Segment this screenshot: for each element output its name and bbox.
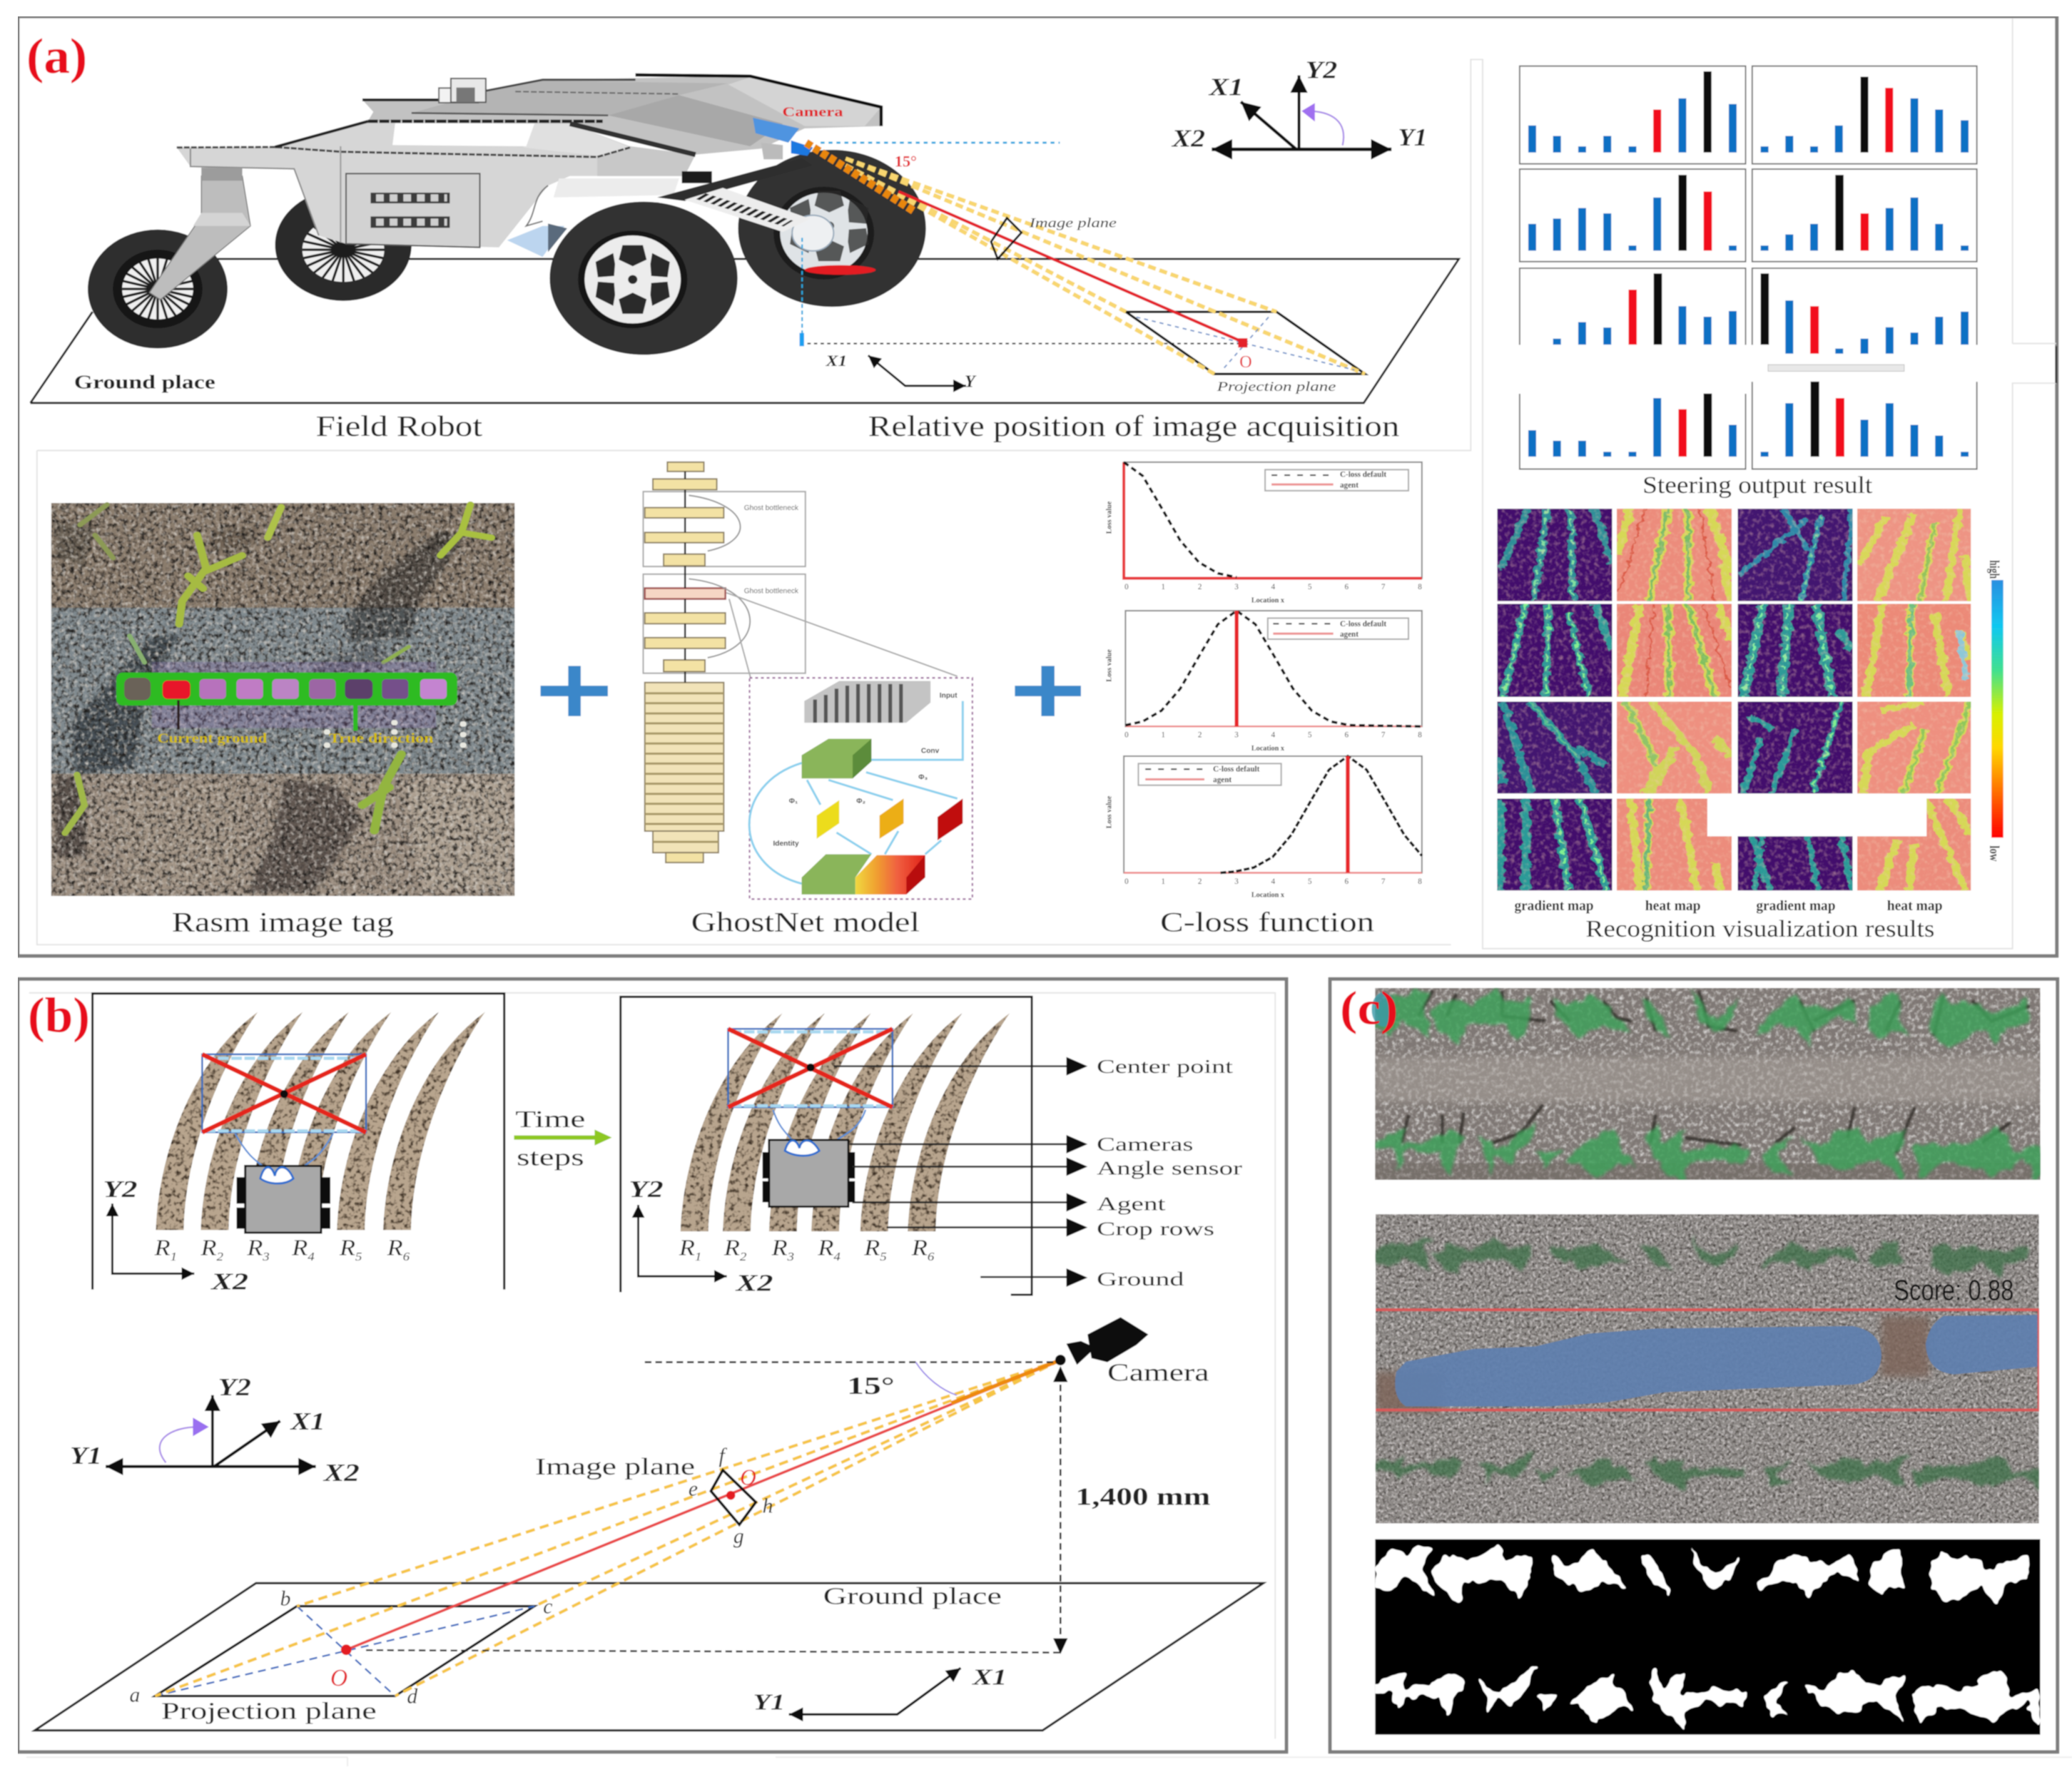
- far front wheel: [738, 150, 926, 307]
- field photo: original: [1375, 985, 2041, 1186]
- connecting arrows: [684, 472, 686, 683]
- C-loss chart text: C-loss default: [1340, 471, 1386, 479]
- optical axis: [346, 1360, 1060, 1650]
- gradient tile r3c3: [1737, 701, 1854, 795]
- time steps arrow: [514, 1106, 611, 1171]
- ground coordinate axes: Y: [965, 373, 977, 392]
- C-loss chart text: [1106, 471, 1422, 900]
- plus sign left: [540, 666, 608, 716]
- light blue rear shroud: [507, 223, 567, 257]
- row labels: 4: [308, 1250, 315, 1263]
- coordinate axes top right: Y2: [1306, 56, 1337, 83]
- gradient tile r2c1: [1497, 603, 1613, 698]
- caption: C-loss: C-loss function: [1160, 907, 1374, 938]
- coordinate axes top right: X2: [1172, 125, 1205, 153]
- soil bands: [51, 503, 514, 896]
- height dashed lines: [366, 1650, 1060, 1653]
- green feature cube: [802, 739, 871, 778]
- image plane label: Image plane: [1028, 216, 1117, 231]
- scene frame: [621, 997, 1032, 1295]
- row labels: 1: [695, 1250, 701, 1263]
- ground plane under robot: [31, 259, 1459, 403]
- bars row 2 left: [1528, 175, 1737, 250]
- bars row 2 right: [1761, 175, 1969, 250]
- legend text: Angle sensor: [1097, 1158, 1242, 1180]
- coordinate axes bottom left: Y1: [70, 1442, 102, 1470]
- GhostNet small labels: Input: [940, 692, 958, 700]
- caption: steering: Steering output result: [1642, 472, 1873, 499]
- time steps arrow: Time: [515, 1106, 585, 1133]
- residual curves: [689, 495, 750, 658]
- projection geometry labels: Camera: [1107, 1358, 1209, 1386]
- gradient tile r4c1: [1497, 798, 1612, 890]
- coordinate axes top right: X1: [1208, 73, 1244, 101]
- color scale bar: low: [1986, 845, 2001, 862]
- heat tile r4c4: [1857, 798, 1971, 890]
- relative position diagram: [799, 143, 1365, 394]
- heat tile r2c4: [1857, 604, 1972, 698]
- projection geometry labels: 1,400 mm: [1076, 1483, 1210, 1511]
- projection plane label: Projection plane: [1216, 380, 1336, 394]
- row labels: R: [818, 1235, 832, 1260]
- row labels: 2: [216, 1250, 223, 1263]
- legend text: Agent: [1097, 1193, 1166, 1216]
- agent vehicle: [237, 1166, 330, 1233]
- gradient tile r4c3: [1737, 798, 1853, 890]
- input feature stack: [804, 681, 930, 723]
- ground axes: Y1: [753, 1690, 785, 1715]
- legend text: [1097, 1056, 1242, 1290]
- ground plane label: Ground place: [74, 372, 215, 394]
- legend text: Center point: [1097, 1056, 1233, 1078]
- projection geometry labels: h: [763, 1495, 773, 1518]
- blue diagonals: [155, 1606, 534, 1696]
- front near wheel: [549, 202, 738, 355]
- illustration: field robot: [88, 75, 926, 355]
- front leg: [149, 168, 250, 300]
- C-loss chart 3: [1124, 756, 1422, 872]
- ghost feature planes: [817, 798, 963, 840]
- score label: Score: 0.88: [1894, 1273, 2014, 1306]
- chart frames: [1520, 66, 1977, 469]
- caption: field robot: Field Robot: [316, 410, 483, 442]
- C-loss chart text: agent: [1213, 775, 1231, 784]
- row labels: 5: [355, 1250, 362, 1263]
- row labels: 3: [786, 1250, 794, 1263]
- heat tile r4c2: [1617, 798, 1732, 890]
- axes: X2: [210, 1269, 248, 1295]
- coordinate axes top right: [1172, 56, 1427, 153]
- row labels: [679, 1235, 935, 1263]
- C-loss chart 1: [1124, 462, 1422, 579]
- row labels: 3: [262, 1250, 270, 1263]
- row labels: 1: [171, 1250, 177, 1263]
- image plane: [711, 1470, 756, 1524]
- heat tile r1c2: [1616, 508, 1732, 602]
- projection geometry labels: Projection plane: [161, 1699, 377, 1725]
- GhostNet small labels: Conv: [921, 748, 940, 755]
- tile captions: heat map: [1645, 898, 1701, 914]
- crop rows: [156, 1012, 485, 1230]
- GhostNet small labels: Identity: [773, 840, 799, 847]
- label: (c): (c): [1340, 982, 1398, 1034]
- binary segmentation mask: [1375, 1539, 2041, 1735]
- C-loss chart text: Loss value: [1106, 501, 1114, 534]
- axes: [103, 1176, 248, 1295]
- bars row 4 right: [1761, 382, 1969, 457]
- projection geometry labels: a: [130, 1684, 140, 1706]
- legend text: Cameras: [1097, 1134, 1193, 1156]
- axes: Y2: [629, 1176, 664, 1203]
- projection geometry labels: c: [543, 1595, 552, 1618]
- C-loss chart text: Loss value: [1106, 649, 1114, 682]
- gradient tile r1c1: [1496, 508, 1613, 602]
- C-loss chart text: 0 1 2 3 4 5 6 7 8: [1124, 583, 1422, 591]
- panel: (b) path and projection model: [18, 979, 1286, 1752]
- white occlusion block: [1707, 797, 1926, 836]
- color scale bar: [1986, 560, 2004, 862]
- steering output bar charts: [1520, 66, 1977, 469]
- right scene: [621, 997, 1032, 1296]
- bars row 3 right: [1761, 273, 1969, 354]
- caption: relative position: Relative position of image acquisition: [868, 410, 1399, 442]
- flow lines: [749, 701, 963, 884]
- projection geometry labels: [130, 1358, 1210, 1725]
- label: (b): (b): [28, 987, 90, 1043]
- yellow camera rays: [845, 158, 1365, 374]
- color scale bar: high: [1986, 560, 2001, 579]
- small wheel: [88, 230, 228, 348]
- C-loss chart text: C-loss default: [1213, 765, 1260, 774]
- tile captions: gradient map: [1514, 898, 1594, 914]
- tile captions: gradient map: [1756, 898, 1835, 914]
- network blocks: [645, 462, 726, 862]
- legend leaders: [834, 1056, 1242, 1290]
- gradient tile r3c1: [1496, 701, 1613, 795]
- coordinate axes bottom left: Y2: [218, 1373, 251, 1401]
- left scene: [93, 994, 504, 1295]
- projection geometry labels: 15°: [847, 1372, 895, 1400]
- caption: GhostNet: GhostNet model: [691, 907, 920, 938]
- C-loss chart text: agent: [1340, 481, 1359, 489]
- projection geometry labels: O: [330, 1665, 347, 1691]
- projection geometry labels: Ground place: [823, 1583, 1002, 1609]
- C-loss chart text: Location x: [1251, 892, 1285, 900]
- panel: (c) crop row detection: [1330, 979, 2058, 1752]
- row labels: 4: [833, 1250, 841, 1263]
- roof sensor: [439, 78, 486, 103]
- row labels: R: [292, 1235, 306, 1260]
- robot body: [177, 121, 696, 248]
- projection geometry labels: g: [733, 1525, 744, 1548]
- projection geometry labels: Image plane: [535, 1454, 695, 1480]
- agent vehicle: [763, 1140, 855, 1207]
- orange ray segment: [806, 143, 915, 211]
- C-loss charts: [1124, 462, 1422, 872]
- row labels: R: [340, 1235, 353, 1260]
- row labels: 6: [403, 1250, 410, 1263]
- GhostNet small labels: Ghost bottleneck: [744, 504, 799, 512]
- detection box: [1376, 1310, 2039, 1410]
- camera mount: [753, 118, 813, 159]
- row labels: R: [724, 1235, 738, 1260]
- angle label: 15°: [895, 152, 917, 170]
- heat tile r2c2: [1616, 603, 1732, 698]
- angle arc: [915, 1362, 957, 1395]
- gradient tile r1c3: [1737, 508, 1854, 602]
- C-loss chart text: Location x: [1251, 597, 1285, 605]
- axes: X2: [735, 1270, 773, 1296]
- bars row 3 left: [1553, 273, 1737, 345]
- red O label: O: [1239, 353, 1252, 372]
- legend text: Crop rows: [1097, 1218, 1214, 1241]
- ground axes: X1: [972, 1664, 1007, 1689]
- annotation tag strip: [116, 673, 457, 706]
- row labels: 6: [928, 1250, 935, 1263]
- yellow tag labels: [157, 731, 434, 746]
- row labels: R: [864, 1235, 878, 1260]
- dotted camera reference lines: [821, 142, 1060, 143]
- projection plane: [155, 1606, 534, 1696]
- recognition heat maps: [1497, 509, 1971, 914]
- axes: Y2: [103, 1176, 138, 1203]
- tag leader lines: [178, 701, 355, 730]
- panel: (a) system overview: [18, 16, 2057, 956]
- field photo: detected row: [1375, 1214, 2040, 1523]
- field of view: [728, 1029, 893, 1144]
- ground plane: [35, 1583, 1264, 1731]
- C-loss chart text: 0 1 2 3 4 5 6 7 8: [1124, 730, 1422, 739]
- row labels: 2: [740, 1250, 746, 1263]
- tile captions: heat map: [1887, 898, 1942, 914]
- label: (a): (a): [26, 29, 87, 84]
- swing arm: [657, 158, 813, 232]
- ground coordinate axes: [825, 352, 977, 392]
- purple halo and white dots: [152, 662, 464, 745]
- yellow rays: [155, 1360, 1060, 1696]
- projection geometry: [35, 1318, 1264, 1731]
- caption: recognition: Recognition visualization results: [1585, 916, 1934, 942]
- crop rows: [681, 1014, 1010, 1231]
- GhostNet small labels: Φ₂: [856, 798, 865, 805]
- yellow tag labels: Current ground: [157, 731, 268, 746]
- C-loss chart text: agent: [1340, 631, 1359, 639]
- projection plane: [1126, 312, 1365, 374]
- row labels: R: [247, 1235, 261, 1260]
- coordinate axes top right: Y1: [1398, 123, 1427, 151]
- time steps arrow: steps: [517, 1145, 584, 1171]
- row labels: R: [387, 1235, 401, 1260]
- image plane: [991, 218, 1022, 259]
- C-loss chart 2: [1125, 611, 1422, 726]
- red robot camera label: Camera: [782, 105, 843, 120]
- projection geometry labels: f: [719, 1445, 728, 1467]
- field of view: [202, 1054, 366, 1173]
- coordinate axes bottom left: X2: [323, 1459, 360, 1487]
- corn seedlings: [65, 504, 492, 833]
- row labels: R: [155, 1235, 168, 1260]
- plus sign right: [1015, 666, 1081, 716]
- yellow tag labels: True direction: [329, 731, 434, 746]
- GhostNet small labels: Φ₃: [918, 774, 928, 782]
- bars row 4 left: [1528, 394, 1737, 457]
- projection geometry labels: e: [689, 1478, 698, 1501]
- heat tile r3c4: [1857, 701, 1972, 795]
- output cube: [802, 854, 925, 895]
- field image with tag: [51, 503, 514, 896]
- projection geometry labels: O: [740, 1465, 756, 1490]
- legend text: Ground: [1097, 1268, 1184, 1290]
- coordinate axes bottom left: X1: [290, 1407, 325, 1435]
- C-loss chart text: Location x: [1251, 745, 1285, 753]
- heat tile r3c2: [1616, 701, 1732, 795]
- row labels: R: [772, 1235, 786, 1260]
- coordinate axes bottom left: [70, 1373, 360, 1487]
- C-loss chart text: C-loss default: [1340, 620, 1386, 628]
- scene frame: [93, 994, 504, 1290]
- C-loss chart text: Loss value: [1106, 795, 1114, 828]
- ground axes: [753, 1664, 1007, 1715]
- caption: image tag: Rasm image tag: [172, 907, 394, 938]
- GhostNet model diagram: [643, 462, 972, 899]
- bars row 1 left: [1528, 71, 1737, 153]
- zoom lines: [726, 593, 958, 678]
- bars row 1 right: [1761, 77, 1969, 153]
- stacked layer stripes: [645, 693, 723, 842]
- ground coordinate axes: X1: [825, 352, 847, 370]
- faint lower crop marks: [26, 1757, 2072, 1766]
- row labels: R: [912, 1235, 925, 1260]
- tile captions: [1514, 898, 1942, 914]
- gradient tile r2c3: [1737, 603, 1854, 698]
- robot roof: [362, 75, 881, 155]
- projection geometry labels: b: [280, 1587, 290, 1610]
- axes: [629, 1176, 773, 1296]
- GhostNet small labels: [744, 504, 958, 847]
- GhostNet small labels: Ghost bottleneck: [744, 588, 799, 596]
- red optical axis: [898, 192, 1244, 342]
- C-loss chart text: 0 1 2 3 4 5 6 7 8: [1124, 877, 1422, 886]
- row labels: R: [679, 1235, 693, 1260]
- heat map tile grid: [1497, 509, 1971, 890]
- rear wheel: [275, 189, 412, 301]
- row labels: 5: [880, 1250, 887, 1263]
- row mask: [1395, 1315, 2038, 1407]
- bottleneck frames: [643, 492, 806, 673]
- row labels: R: [201, 1235, 215, 1260]
- row labels: [154, 1235, 410, 1263]
- projection geometry labels: d: [407, 1685, 417, 1708]
- camera icon: [1055, 1318, 1148, 1365]
- heat tile r1c4: [1857, 508, 1972, 602]
- ghost module box: [750, 678, 972, 899]
- GhostNet small labels: Φ₁: [789, 798, 798, 805]
